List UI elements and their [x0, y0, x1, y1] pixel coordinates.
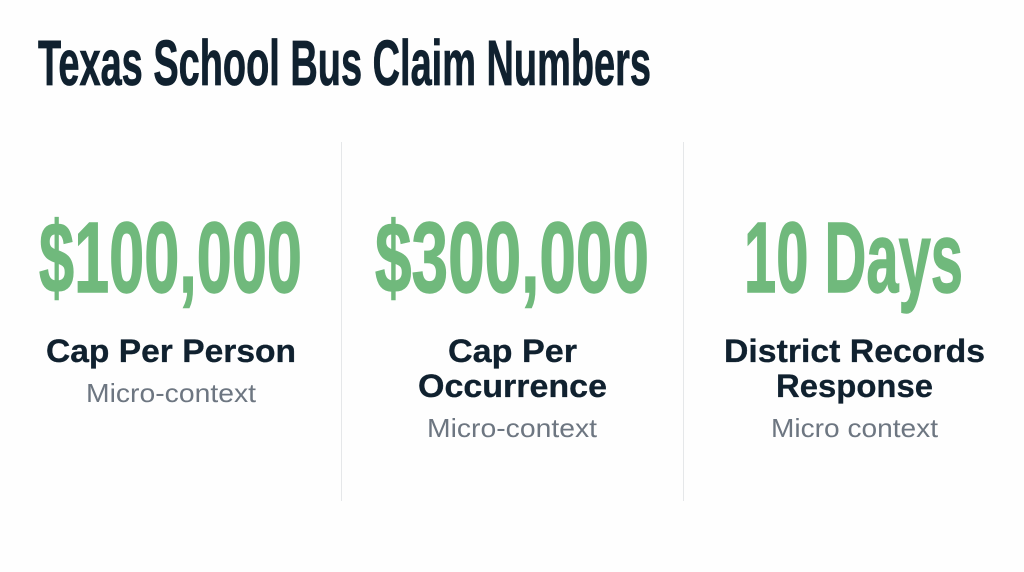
label: cap per person: Cap Per Person [46, 333, 296, 369]
micro context text: Micro context [771, 413, 939, 443]
label: district records response: Response [776, 368, 933, 404]
label: district records response [724, 333, 985, 404]
stat: $300,000: $300,000 [375, 202, 649, 314]
label: cap per occurrence: Cap Per [448, 333, 577, 369]
micro-context text: Micro-context [427, 413, 598, 443]
panel: district records response [724, 202, 985, 443]
label: cap per occurrence [418, 333, 607, 404]
panel: cap per person [39, 202, 302, 408]
panel: cap per occurrence [375, 202, 649, 443]
label: district records response: District Records [724, 333, 985, 369]
label: cap per occurrence: Occurrence [418, 368, 607, 404]
micro-context text: Micro-context [86, 378, 257, 408]
stat: $100,000: $100,000 [39, 202, 302, 314]
